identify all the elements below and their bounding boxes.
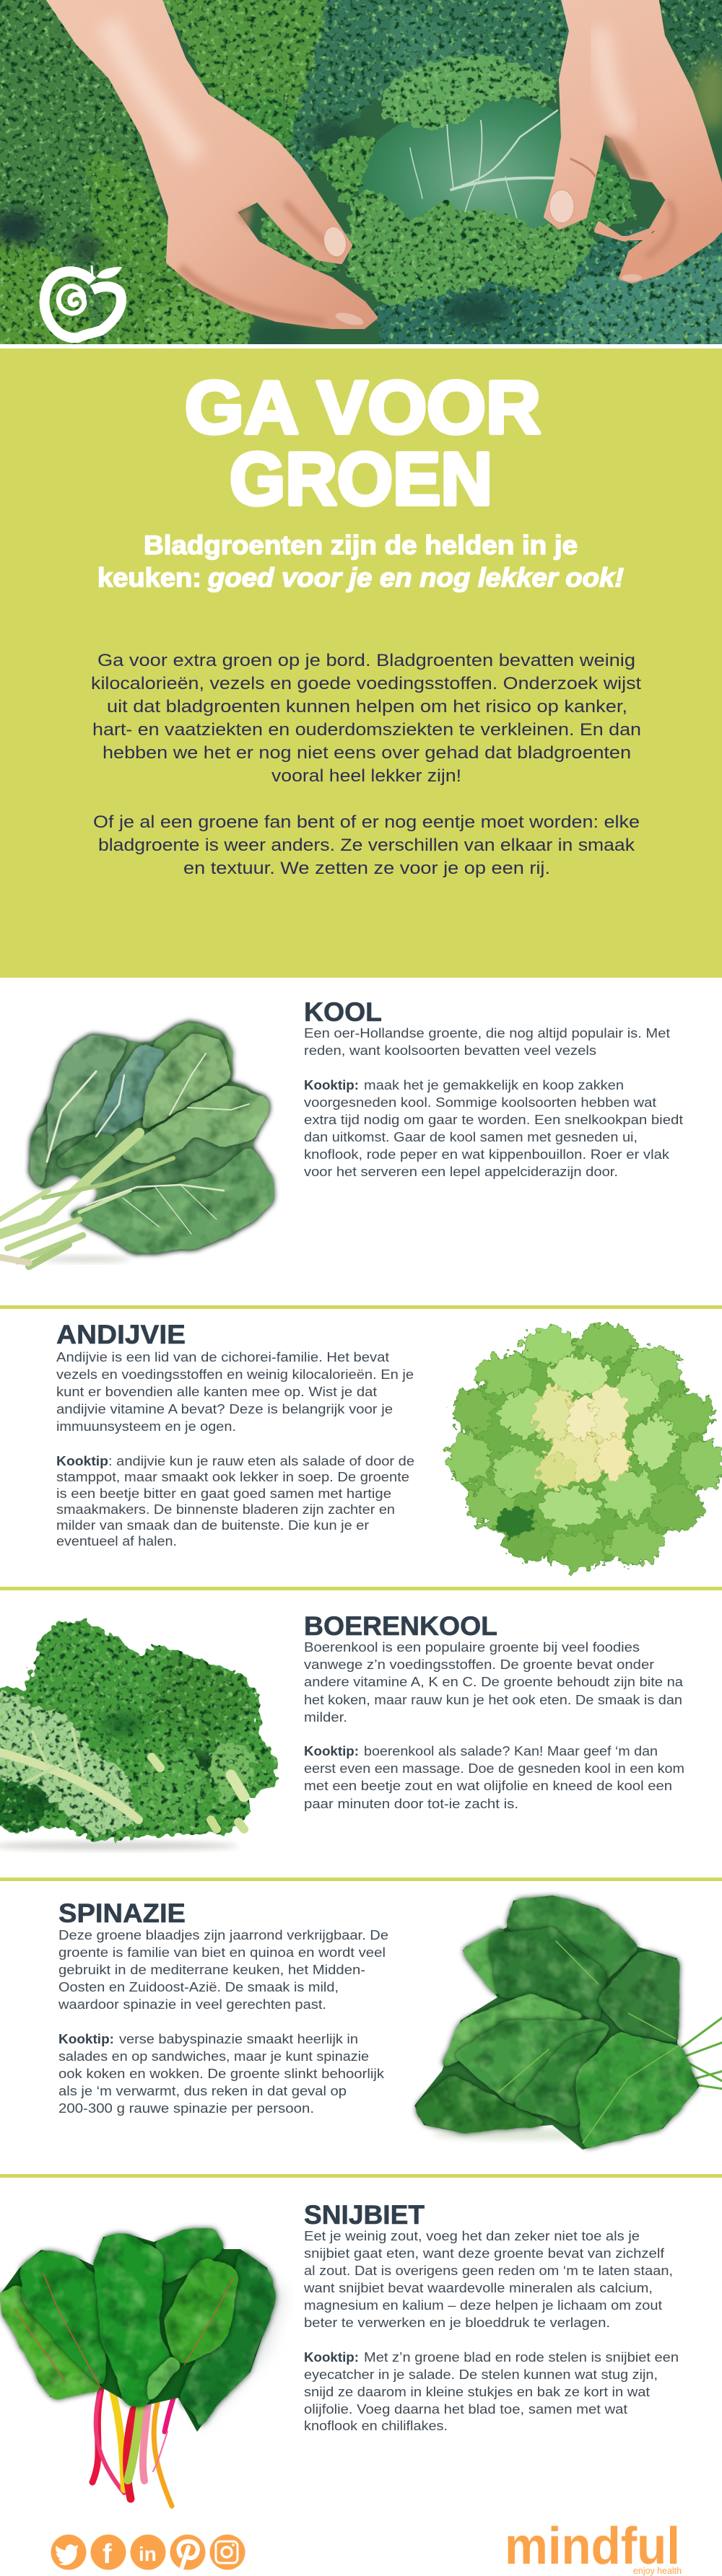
mindful logo: enjoy health [633, 2565, 682, 2576]
kool text: Een oer-Hollandse groente, die nog altijd populair is. Met [304, 1026, 670, 1041]
subtitle: keuken: [97, 563, 201, 592]
intro text: kilocalorieën, vezels en goede voedingsstoffen. Onderzoek wijst [91, 674, 641, 693]
andijvie text: andijvie vitamine A bevat? Deze is belangrijk voor je [56, 1402, 393, 1416]
heading: boerenkool: BOERENKOOL [304, 1611, 497, 1641]
right finger nail [549, 190, 574, 223]
andijvie text: kunt er bovendien alle kanten mee op. Wist je dat [56, 1385, 377, 1399]
boerenkool text: andere vitamine A, K en C. De groente behoudt zijn bite na [304, 1675, 684, 1689]
spinazie text: 200-300 g rauwe spinazie per persoon. [58, 2101, 314, 2116]
boerenkool text: Kooktip: [304, 1744, 359, 1758]
snijbiet text: Kooktip: [304, 2350, 359, 2365]
kool text: reden, want koolsoorten bevatten veel vezels [304, 1043, 596, 1058]
icon: linkedin: in [139, 2543, 157, 2565]
intro text: uit dat bladgroenten kunnen helpen om het risico op kanker, [107, 697, 627, 717]
left hand [46, 0, 375, 328]
heading: andijvie: ANDIJVIE [56, 1320, 186, 1349]
spinazie text: salades en op sandwiches, maar je kunt spinazie [58, 2049, 369, 2064]
boerenkool text [304, 1611, 684, 1811]
snijbiet text: al zout. Dat is overigens geen reden om ‘m te laten staan, [304, 2264, 673, 2278]
image: boerenkool [0, 1618, 279, 1850]
icon: linkedin [130, 2534, 166, 2570]
snijbiet text [303, 2200, 679, 2433]
snijbiet text: olijfolie. Voeg daarna het blad toe, samen met wat [304, 2402, 627, 2417]
panel: green intro [0, 349, 722, 978]
intro text: hebben we het er nog niet eens over gehad dat bladgroenten [103, 743, 631, 763]
kool text: voorgesneden kool. Sommige koolsoorten hebben wat [304, 1095, 656, 1110]
icon: pinterest [170, 2534, 205, 2570]
boerenkool text: eerst even een massage. Doe de gesneden kool in een kom [304, 1761, 684, 1776]
kool text: voor het serveren een lepel appelciderazijn door. [304, 1165, 618, 1179]
icon: twitter [51, 2534, 87, 2570]
dark hollows [0, 58, 722, 350]
andijvie text: smaakmakers. De binnenste bladeren zijn zachter en [56, 1502, 395, 1517]
title: GROEN [230, 437, 492, 520]
right hand [546, 0, 722, 281]
spinazie text: Kooktip: [58, 2032, 114, 2046]
kale background [0, 0, 722, 361]
kool stems [0, 1133, 173, 1266]
kool text: extra tijd nodig om gaar te worden. Een snelkookpan biedt [304, 1113, 683, 1127]
spinazie text: als je ‘m verwarmt, dus reken in dat geval op [58, 2084, 347, 2098]
intro text [91, 651, 641, 878]
hero photo: hands holding kale [0, 0, 722, 361]
spinazie text: Oosten en Zuidoost-Azië. De smaak is mild, [58, 1980, 339, 1994]
image: kool [0, 1021, 273, 1266]
andijvie text [56, 1320, 414, 1548]
boerenkool text: vanwege z’n voedingsstoffen. De groente bevat onder [304, 1657, 654, 1672]
snijbiet text: snijd ze daarom in kleine stukjes en bak ze kort in wat [304, 2385, 650, 2399]
smooth central kale leaf [358, 97, 561, 229]
image: andijvie [448, 1324, 722, 1570]
intro text: hart- en vaatziekten en ouderdomsziekten te verkleinen. En dan [92, 720, 641, 740]
heading: snijbiet: SNIJBIET [304, 2200, 425, 2230]
heading: spinazie: SPINAZIE [58, 1898, 186, 1928]
andijvie text: milder van smaak dan de buitenste. Die kun je er [56, 1518, 369, 1533]
snijbiet text: eyecatcher in je salade. De stelen kunnen wat stug zijn, [304, 2367, 658, 2382]
intro text: en textuur. We zetten ze voor je op een rij. [183, 859, 550, 878]
intro text: vooral heel lekker zijn! [271, 766, 461, 786]
intro text: Of je al een groene fan bent of er nog eentje moet worden: elke [93, 812, 640, 832]
snijbiet text: knoflook en chiliflakes. [304, 2419, 448, 2433]
title: GA VOOR [185, 366, 541, 449]
icon: facebook: f [103, 2539, 112, 2570]
snijbiet text: snijbiet gaat eten, want deze groente bevat van zichzelf [304, 2246, 665, 2261]
boerenkool text: het koken, maar rauw kun je het ook eten. De smaak is dan [304, 1693, 682, 1707]
snijbiet text: magnesium en kalium – deze helpen je lichaam om zout [304, 2298, 662, 2313]
mindful logo: mindful [505, 2518, 680, 2575]
image: spinazie [414, 1896, 722, 2150]
icon: instagram [209, 2534, 245, 2570]
social icons [51, 2534, 245, 2570]
left thumb nail [323, 227, 347, 257]
spinazie text: verse babyspinazie smaakt heerlijk in [119, 2032, 358, 2046]
kool text: Kooktip: [304, 1078, 359, 1092]
andijvie text: is een beetje bitter en gaat goed samen met hartige [56, 1486, 391, 1501]
kale frill around leaf [260, 56, 635, 307]
subtitle: goed voor je en nog lekker ook! [207, 563, 624, 592]
hero logo: white swirl apple [45, 266, 122, 338]
spinazie text: ook koken en wokken. De groente slinkt behoorlijk [58, 2067, 385, 2081]
subtitle [97, 530, 624, 592]
spinazie text: waardoor spinazie in veel gerechten past. [58, 1997, 326, 2012]
boerenkool text: milder. [304, 1710, 347, 1725]
spinazie text: groente is familie van biet en quinoa en wordt veel [58, 1945, 386, 1960]
spinazie text [58, 1898, 388, 2116]
boerenkool text: met een beetje zout en wat olijfolie en kneed de kool een [304, 1779, 672, 1793]
title [185, 366, 541, 520]
boerenkool text: paar minuten door tot-ie zacht is. [304, 1797, 518, 1811]
image: snijbiet [0, 2229, 285, 2506]
andijvie text: stamppot, maar smaakt ook lekker in soep. De groente [56, 1470, 409, 1484]
snijbiet text: Met z’n groene blad en rode stelen is snijbiet een [364, 2350, 679, 2365]
andijvie text: eventueel af halen. [56, 1534, 177, 1548]
intro text: Ga voor extra groen op je bord. Bladgroenten bevatten weinig [97, 651, 635, 670]
divider lines [0, 1305, 722, 2178]
spinazie text: gebruikt in de mediterrane keuken, het Midden- [58, 1963, 365, 1977]
snijbiet text: beter te verwerken en je bloeddruk te verlagen. [304, 2316, 610, 2330]
andijvie text: Kooktip [56, 1454, 108, 1468]
heading: kool: KOOL [304, 997, 382, 1027]
andijvie text: immuunsysteem en je ogen. [56, 1419, 236, 1434]
snijbiet text: Eet je weinig zout, voeg het dan zeker niet toe als je [304, 2229, 640, 2243]
kool text: maak het je gemakkelijk en koop zakken [364, 1078, 624, 1092]
kool text: dan uitkomst. Gaar de kool samen met gesneden ui, [304, 1130, 638, 1144]
kool text [304, 997, 683, 1179]
andijvie text: Andijvie is een lid van de cichorei-familie. Het bevat [56, 1350, 389, 1364]
intro text: bladgroente is weer anders. Ze verschillen van elkaar in smaak [98, 836, 635, 855]
andijvie text: : andijvie kun je rauw eten als salade of door de [108, 1454, 414, 1468]
boerenkool text: boerenkool als salade? Kan! Maar geef ‘m dan [364, 1744, 658, 1758]
subtitle: Bladgroenten zijn de helden in je [144, 530, 578, 560]
snijbiet text: want snijbiet bevat waardevolle mineralen als calcium, [303, 2281, 653, 2295]
kool text: knoflook, rode peper en wat kippenbouillon. Roer er vlak [304, 1147, 670, 1162]
boerenkool text: Boerenkool is een populaire groente bij veel foodies [304, 1640, 640, 1655]
spinazie text: Deze groene blaadjes zijn jaarrond verkrijgbaar. De [58, 1928, 388, 1942]
icon: facebook [91, 2534, 126, 2570]
andijvie text: vezels en voedingsstoffen en weinig kilocalorieën. En je [56, 1367, 414, 1382]
